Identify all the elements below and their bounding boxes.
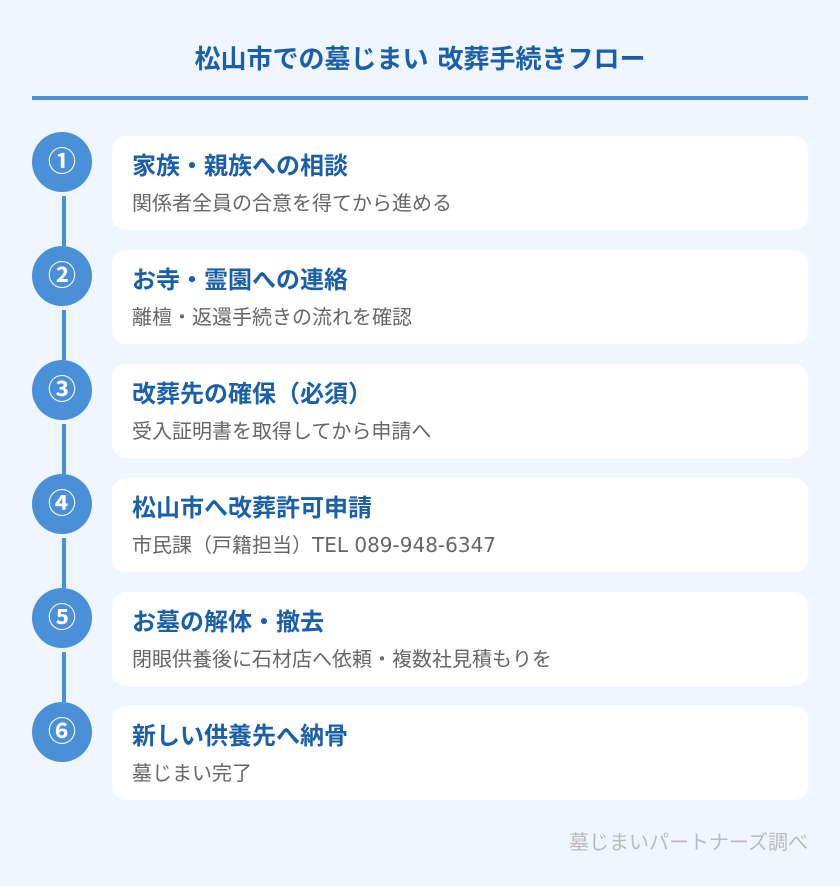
step 3 text: 受入証明書を取得してから申請へ [132,419,431,443]
step 4 number: ④ [48,482,76,522]
step 5 number [32,588,92,648]
panel: step 4 [112,478,808,572]
step 1 number: ① [48,140,76,180]
step 6 text: 墓じまい完了 [132,761,252,785]
step 5 number: ⑤ [48,596,76,636]
step 5 heading: お墓の解体・撤去 [132,608,324,636]
step 6 number: ⑥ [48,710,76,750]
step 1 heading: 家族・親族への相談 [132,152,348,180]
title: 松山市での墓じまい 改葬手続きフロー [194,45,646,75]
step 2 number: ② [48,254,76,294]
panel: step 6 [112,706,808,800]
step 1 number [32,132,92,192]
panel: step 2 [112,250,808,344]
step 6 heading: 新しい供養先へ納骨 [132,722,348,750]
step 2 number [32,246,92,306]
step 1 text: 関係者全員の合意を得てから進める [132,191,452,215]
step 3 number: ③ [48,368,76,408]
step 6 number [32,702,92,762]
source note: 墓じまいパートナーズ調べ [569,830,808,854]
step 4 number [32,474,92,534]
step 4 text: 市民課（戸籍担当）TEL 089-948-6347 [132,533,496,557]
panel: step 5 [112,592,808,686]
panel: step 3 [112,364,808,458]
step 4 heading: 松山市へ改葬許可申請 [132,494,372,522]
step 2 heading: お寺・霊園への連絡 [132,266,348,294]
step 3 number [32,360,92,420]
step 5 text: 閉眼供養後に石材店へ依頼・複数社見積もりを [132,647,552,671]
panel: step 1 [112,136,808,230]
step 2 text: 離檀・返還手続きの流れを確認 [132,305,412,329]
step 3 heading: 改葬先の確保（必須） [132,380,372,408]
